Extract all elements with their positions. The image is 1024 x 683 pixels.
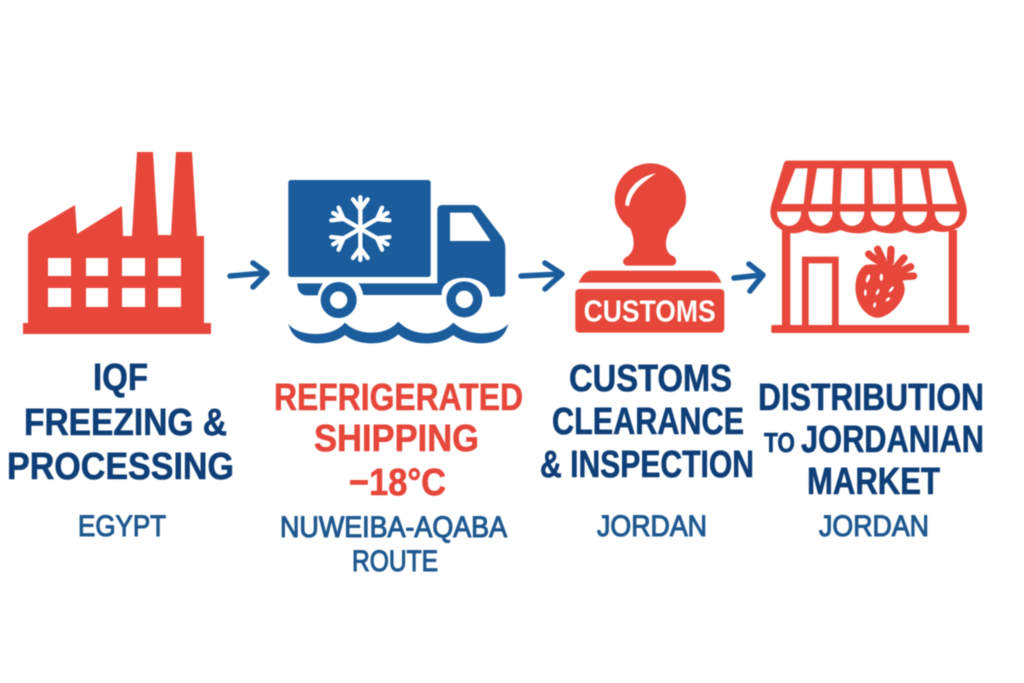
label: Jordan (market): JORDAN bbox=[819, 510, 929, 543]
icon: factory bbox=[23, 152, 211, 334]
label: Nuweiba-Aqaba route bbox=[280, 511, 507, 578]
heading: customs clearance and inspection bbox=[540, 358, 754, 486]
heading: customs clearance and inspection: CUSTOMS bbox=[569, 358, 732, 400]
arrow: truck to customs bbox=[521, 263, 562, 289]
label: Egypt: EGYPT bbox=[78, 510, 166, 543]
arrow: customs to store bbox=[734, 264, 763, 291]
heading: IQF freezing and processing: IQF bbox=[93, 357, 148, 399]
heading: IQF freezing and processing: PROCESSING bbox=[7, 446, 234, 488]
heading: distribution to Jordanian market: DISTRIBUTION bbox=[758, 377, 984, 419]
heading: IQF freezing and processing: FREEZING & bbox=[24, 402, 227, 444]
heading: distribution to Jordanian market bbox=[758, 377, 984, 503]
heading: refrigerated shipping: SHIPPING bbox=[314, 418, 479, 460]
icon: snowflake bbox=[330, 197, 391, 260]
label: Nuweiba-Aqaba route: NUWEIBA-AQABA bbox=[280, 511, 507, 544]
heading: refrigerated shipping: −18°C bbox=[349, 462, 446, 504]
icon: storefront with strawberry bbox=[770, 161, 969, 333]
heading: distribution to Jordanian market: MARKET bbox=[807, 461, 940, 503]
heading: customs clearance and inspection: CLEARANCE bbox=[552, 401, 744, 443]
heading: IQF freezing and processing bbox=[7, 357, 234, 488]
heading: customs clearance and inspection: & INSPECTION bbox=[540, 444, 754, 486]
heading: distribution to Jordanian market: TO bbox=[764, 427, 795, 458]
arrow: factory to truck bbox=[230, 263, 267, 287]
heading: distribution to Jordanian market: JORDANIAN bbox=[801, 419, 984, 461]
heading: refrigerated shipping: REFRIGERATED bbox=[274, 377, 523, 419]
icon: strawberry bbox=[855, 249, 914, 318]
icon: customs stamp bbox=[575, 163, 724, 333]
heading: refrigerated shipping bbox=[274, 377, 523, 504]
label: Nuweiba-Aqaba route: ROUTE bbox=[352, 545, 438, 578]
icon: customs stamp: CUSTOMS bbox=[584, 294, 716, 328]
icon: refrigerated truck on water bbox=[288, 180, 508, 343]
label: Jordan (customs): JORDAN bbox=[597, 510, 707, 543]
